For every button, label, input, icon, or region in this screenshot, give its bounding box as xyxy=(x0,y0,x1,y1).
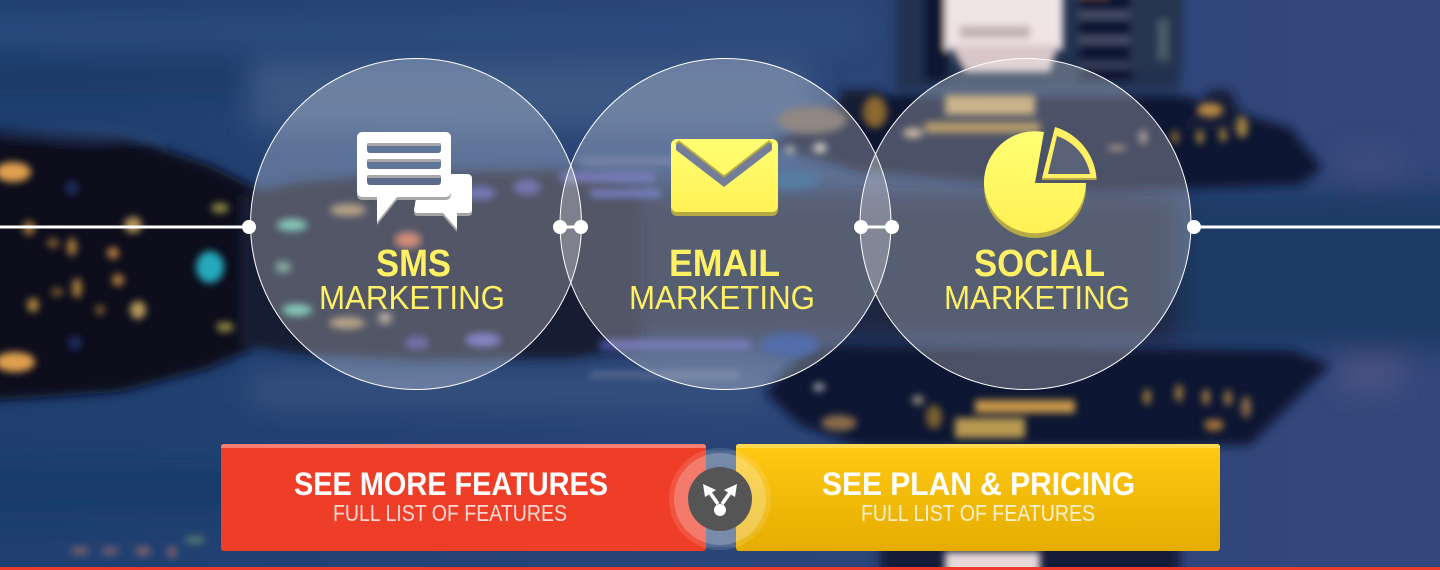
button heading: SEE PLAN & PRICING xyxy=(822,466,1135,502)
button: see more features xyxy=(221,444,706,551)
icon: split arrows xyxy=(703,484,737,516)
circle: email marketing xyxy=(560,58,891,390)
button: see plan and pricing xyxy=(736,444,1220,551)
bottom reflections xyxy=(945,552,1040,570)
label: marketing: MARKETING xyxy=(319,279,505,316)
button subtext: FULL LIST OF FEATURES xyxy=(861,500,1095,526)
button subtext: FULL LIST OF FEATURES xyxy=(333,500,567,526)
island lights xyxy=(945,95,1035,115)
label: SOCIAL: SOCIAL xyxy=(974,243,1105,285)
connector nodes xyxy=(242,220,1201,234)
connector lines xyxy=(0,226,1440,228)
circle: social marketing xyxy=(860,58,1191,390)
circle: SMS marketing xyxy=(250,58,582,390)
left lights xyxy=(0,162,31,182)
light streaks through circle one xyxy=(330,204,366,216)
button heading: SEE MORE FEATURES xyxy=(294,466,608,502)
icon: chat bubbles xyxy=(357,132,472,232)
shoreline and purple lights in circle two xyxy=(560,172,655,182)
label: SMS: SMS xyxy=(376,243,451,285)
label: marketing: MARKETING xyxy=(629,279,815,316)
tower xyxy=(925,0,947,80)
center badge xyxy=(669,448,771,550)
bottom stripe xyxy=(0,567,1440,570)
label: EMAIL: EMAIL xyxy=(669,243,780,285)
reflection lights xyxy=(975,400,1075,413)
icon: envelope xyxy=(671,139,778,216)
icon: pie chart xyxy=(984,127,1096,238)
label: marketing: MARKETING xyxy=(944,279,1130,316)
